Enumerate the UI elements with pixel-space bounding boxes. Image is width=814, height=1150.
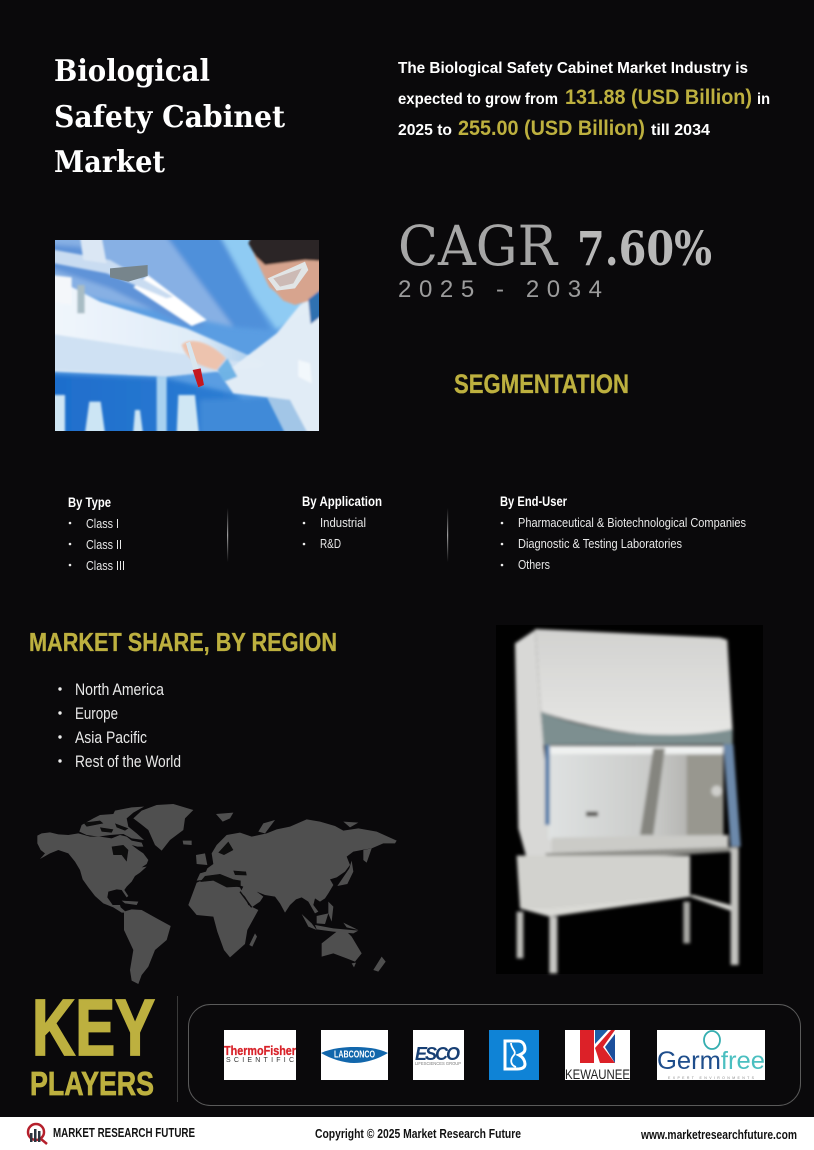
- region list: North America: [75, 681, 165, 699]
- logo: Esco: LIFESCIENCES GROUP: [415, 1061, 461, 1066]
- footer brand name: MARKET RESEARCH FUTURE: [53, 1126, 195, 1140]
- footer bar: [0, 1117, 814, 1150]
- region list: Europe: [75, 705, 118, 723]
- copyright: Copyright © 2025 Market Research Future: [315, 1127, 521, 1141]
- market growth summary: in: [757, 91, 770, 108]
- segment list: by end-user: By End-User: [500, 493, 567, 509]
- title: Safety Cabinet: [54, 100, 285, 135]
- region list: [58, 681, 181, 771]
- logo: blue B mark: [489, 1030, 539, 1080]
- heading: key players: KEY: [32, 983, 155, 1072]
- world map: [37, 804, 397, 984]
- segment list: by end-user: Diagnostic & Testing Laboratories: [518, 536, 682, 551]
- logo: Esco: [413, 1030, 464, 1080]
- title: Market: [54, 145, 165, 180]
- region list: Rest of the World: [75, 753, 181, 771]
- market growth summary: 131.88 (USD Billion): [565, 86, 752, 109]
- segment list: by type: Class I: [86, 516, 119, 531]
- logo: Kewaunee: [565, 1030, 630, 1082]
- segment list: by type: Class III: [86, 558, 125, 573]
- CAGR callout: 7.60%: [577, 222, 712, 277]
- logo: Germfree: [657, 1030, 765, 1080]
- segment list: by type: By Type: [68, 494, 111, 510]
- photo: scientist in laboratory: [55, 240, 319, 431]
- heading: key players: PLAYERS: [30, 1065, 154, 1102]
- panel: key player logos: [188, 1004, 800, 1106]
- logo: Esco: ESCO: [415, 1044, 460, 1064]
- heading: segmentation: SEGMENTATION: [454, 369, 629, 399]
- segment list: by application: Industrial: [320, 515, 366, 530]
- segment list: by end-user: Others: [518, 557, 550, 572]
- CAGR callout: 2025 - 2034: [398, 276, 602, 303]
- market growth summary: expected to grow from: [398, 91, 558, 108]
- heading: market share by region: MARKET SHARE, BY REGION: [29, 627, 337, 657]
- logo: Kewaunee: KEWAUNEE: [565, 1066, 630, 1082]
- market growth summary: 255.00 (USD Billion): [458, 117, 645, 140]
- logo: Germfree: EXPERT ENVIRONMENTS: [668, 1076, 755, 1080]
- segment list: by application: [302, 493, 382, 551]
- CAGR callout: [398, 214, 712, 303]
- title: [54, 54, 285, 180]
- photo: biological safety cabinet: [496, 625, 763, 974]
- heading: key players: [30, 983, 155, 1102]
- segment list: by end-user: Pharmaceutical & Biotechnological Companies: [518, 515, 746, 530]
- segment list: by type: Class II: [86, 537, 122, 552]
- logo: Thermo Fisher Scientific: SCIENTIFIC: [226, 1057, 294, 1064]
- segment list: by application: By Application: [302, 493, 382, 509]
- segment list: by type: [68, 494, 125, 573]
- region list: Asia Pacific: [75, 729, 147, 747]
- segment list: by end-user: [500, 493, 746, 572]
- market growth summary: 2025 to: [398, 122, 452, 139]
- logo: Labconco: [321, 1030, 388, 1080]
- market growth summary: [398, 60, 770, 140]
- logo: Thermo Fisher Scientific: ThermoFisher: [224, 1043, 296, 1058]
- title: Biological: [54, 54, 210, 89]
- CAGR callout: CAGR: [398, 214, 559, 278]
- logo: Germfree: Germfree: [657, 1047, 765, 1075]
- segment list: by application: R&D: [320, 536, 341, 551]
- market growth summary: The Biological Safety Cabinet Market Industry is: [398, 60, 748, 77]
- logo: Thermo Fisher Scientific: [224, 1030, 296, 1080]
- logo: Labconco: LABCONCO: [334, 1048, 375, 1060]
- market growth summary: till 2034: [651, 122, 710, 139]
- icon: market research future logo: [28, 1124, 47, 1144]
